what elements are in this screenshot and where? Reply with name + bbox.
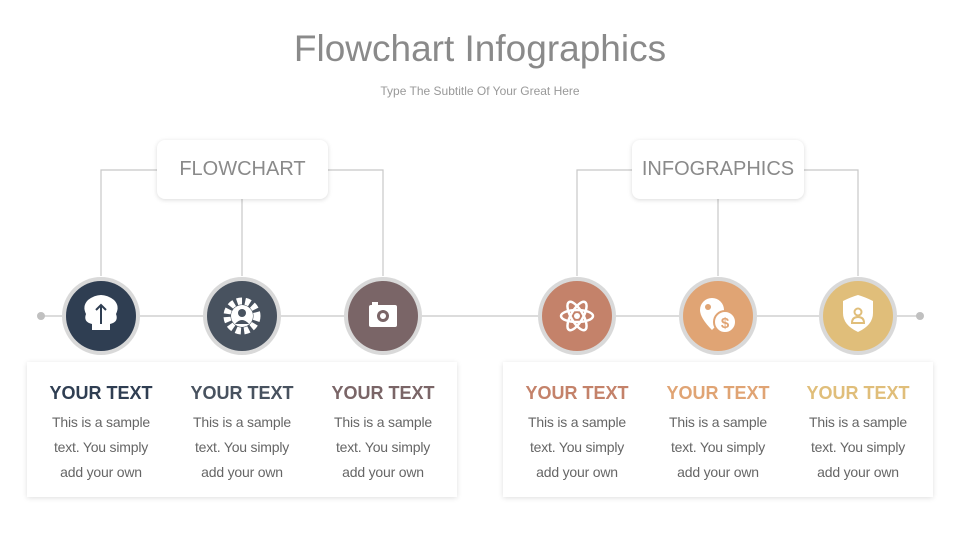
text column 2: YOUR TEXT	[190, 383, 294, 403]
text column 2	[190, 383, 294, 480]
text column 4: YOUR TEXT	[525, 383, 628, 403]
text column 6: This is a sample text. You simply add your own	[809, 414, 907, 480]
icon: brain	[62, 277, 140, 355]
text column 4	[525, 383, 628, 480]
icon: location dollar: $	[721, 315, 730, 332]
text column 3: This is a sample text. You simply add your own	[334, 414, 432, 480]
text column 5: This is a sample text. You simply add your own	[669, 414, 767, 480]
panel: left	[27, 362, 457, 497]
title: Flowchart Infographics	[294, 28, 666, 69]
text column 4: This is a sample text. You simply add your own	[528, 414, 626, 480]
label: FLOWCHART	[157, 140, 328, 199]
text column 3	[331, 383, 434, 480]
text column 5	[666, 383, 770, 480]
icon: atom	[538, 277, 616, 355]
label: INFOGRAPHICS: INFOGRAPHICS	[642, 158, 794, 180]
text column 1	[49, 383, 152, 480]
text column 5: YOUR TEXT	[666, 383, 770, 403]
text column 3: YOUR TEXT	[331, 383, 434, 403]
icon: gear	[203, 277, 281, 355]
label: INFOGRAPHICS	[632, 140, 804, 199]
icon: camera	[344, 277, 422, 355]
text column 6	[806, 383, 910, 480]
label: FLOWCHART: FLOWCHART	[179, 158, 306, 180]
icon: shield	[819, 277, 897, 355]
panel: right	[503, 362, 933, 497]
icon: location dollar	[679, 277, 757, 355]
text column 1: This is a sample text. You simply add your own	[52, 414, 150, 480]
text column 2: This is a sample text. You simply add your own	[193, 414, 291, 480]
text column 6: YOUR TEXT	[806, 383, 910, 403]
subtitle: Type The Subtitle Of Your Great Here	[380, 84, 580, 98]
text column 1: YOUR TEXT	[49, 383, 152, 403]
